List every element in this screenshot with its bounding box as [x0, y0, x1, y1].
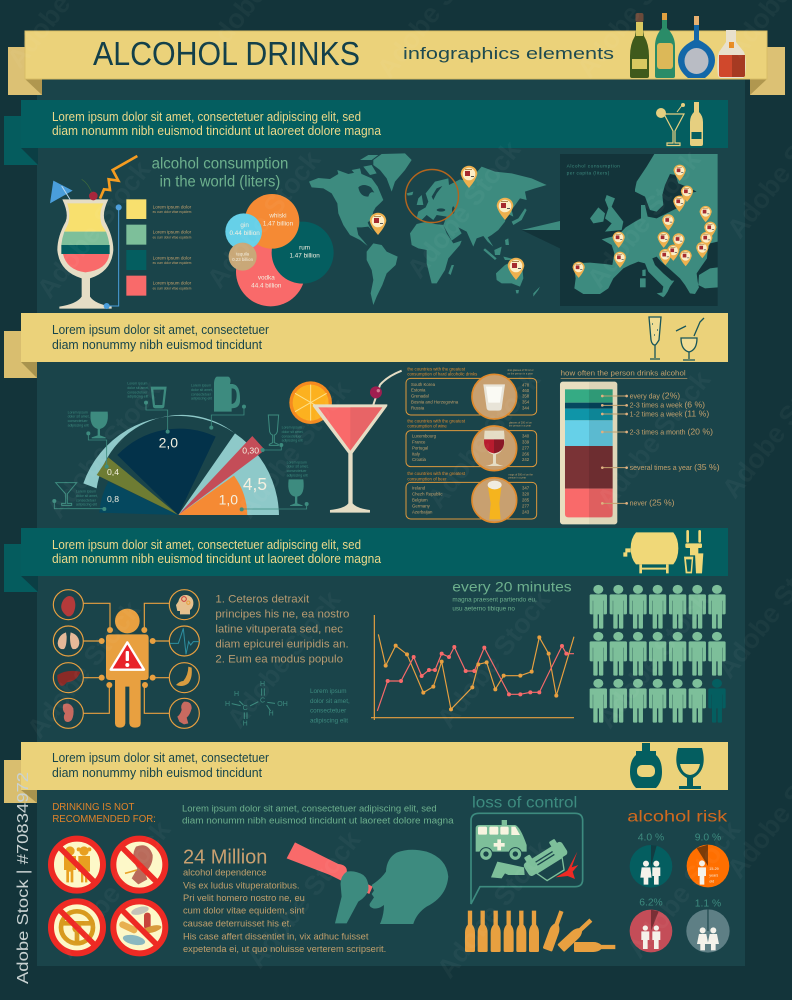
- warning heading: DRINKING IS NOT: [52, 802, 135, 813]
- icon: fetus: [177, 702, 192, 724]
- country consumption tables: 242: [522, 457, 530, 462]
- small captions: adipiscing elit: [287, 473, 308, 477]
- risk pie: 1.1%: 1.1 %: [695, 899, 721, 910]
- country consumption tables: Croatia: [412, 457, 427, 462]
- body text: expetenda ei, ut quo noluisse verterem scripserit.: [183, 944, 386, 954]
- country consumption tables: 277: [522, 504, 530, 509]
- stock watermark text: Adobe Stock | #70834972: [15, 772, 32, 984]
- icon: cognac bottle and snifter: [630, 743, 704, 789]
- section 2 banner: [4, 313, 728, 378]
- main panel: [37, 78, 745, 966]
- body text: cum dolor vitae equidem, sint: [183, 906, 305, 916]
- small captions: adipiscing elit: [127, 395, 148, 399]
- country consumption tables: the countries with the greatest: [407, 366, 466, 371]
- icon: shot glass circle: [472, 374, 517, 419]
- fan values: 0,30: [242, 446, 259, 456]
- icon: wine glass: [288, 479, 304, 506]
- small captions: adipiscing elit: [68, 423, 89, 427]
- molecule diagram: H: [243, 720, 248, 727]
- wedge 2,0: [117, 429, 216, 515]
- europe pins: [573, 165, 716, 278]
- country consumption tables: 340: [522, 434, 530, 439]
- banner text: Lorem ipsum dolor sit amet, consectetuer adipiscing elit, sed: [52, 110, 361, 124]
- lorem text: diam nonumm nibh euismod tincidunt ut laoreet dolore magna: [182, 816, 454, 826]
- wedge 0,4: [97, 457, 178, 515]
- numbered text: diam epicurei euripidis an.: [215, 639, 349, 651]
- small captions: Lorem ipsum: [191, 384, 211, 388]
- country consumption tables: 347: [522, 486, 530, 491]
- section 4 banner: diam nonummy nibh euismod tincidunt: [52, 766, 263, 780]
- frequency glass chart: 1-2 times a week (11 %): [630, 409, 709, 419]
- subtitle: infographics elements: [403, 45, 614, 63]
- europe inset map: Alcohol consumption: [567, 163, 620, 169]
- icon: wine glass circle: [472, 426, 517, 471]
- side text: adipiscing elit: [310, 717, 348, 724]
- bubble chart: tequila: [236, 252, 250, 257]
- bubble chart: 1.47 billion: [263, 221, 294, 228]
- molecule diagram: C: [243, 705, 248, 712]
- icon: crash burst: [556, 852, 578, 879]
- body figure: [99, 609, 156, 728]
- world map: [309, 153, 547, 305]
- bubble chart: 0.23 billion: [232, 257, 254, 262]
- small captions: adipiscing elit: [76, 503, 97, 507]
- molecule diagram: [225, 681, 288, 727]
- icon: beer glass circle: [472, 478, 517, 522]
- country consumption tables: Russia: [411, 405, 425, 410]
- speech bubble: [471, 813, 583, 904]
- risk pie: 4.0%: [630, 833, 672, 888]
- small captions: consectetuer: [191, 392, 212, 396]
- country consumption tables: 266: [522, 451, 530, 456]
- country consumption tables: Germany: [412, 504, 431, 509]
- warning heading: RECOMMENDED FOR:: [52, 814, 156, 825]
- section 2 banner: diam nonummy nibh euismod tincidunt: [52, 338, 263, 352]
- banner text: Lorem ipsum dolor sit amet, consectetuer: [52, 323, 269, 337]
- molecule diagram: OH: [277, 701, 288, 708]
- icon: heartbeat: [170, 628, 199, 654]
- icon: heart: [61, 596, 75, 616]
- fan values: [107, 434, 267, 508]
- warning sign: [111, 642, 144, 670]
- lorem text: Lorem ipsum dolor sit amet, consectetuer adipiscing elit, sed: [182, 804, 437, 814]
- risk pie: 6.2%: 6.2%: [639, 897, 663, 908]
- country consumption tables: glasses of 200 ml on: [509, 421, 532, 424]
- icon: lungs: [58, 632, 79, 649]
- body text: Vis ex ludus vituperatoribus.: [183, 880, 299, 890]
- frequency glass chart: 2-3 times a week (6 %): [630, 400, 705, 410]
- europe inset map: [522, 154, 718, 306]
- country consumption tables: 344: [522, 405, 530, 410]
- line chart: [371, 615, 574, 720]
- ban icon: pills: [113, 901, 165, 953]
- country consumption tables: 460: [522, 388, 530, 393]
- fan values: 0,8: [107, 494, 119, 504]
- country consumption tables: 354: [522, 400, 530, 405]
- small captions: [68, 382, 309, 507]
- people pictogram: [590, 585, 726, 723]
- bubble chart: 44.4 billion: [251, 282, 282, 289]
- heading: alcohol consumption: in the world (liters): [160, 174, 280, 191]
- country consumption tables: consumption of wine: [407, 424, 447, 429]
- risk pie: 9.0%: [687, 833, 729, 887]
- icon: flute: [268, 415, 279, 445]
- banner text: Lorem ipsum dolor sit amet, consectetuer adipiscing elit, sed: [52, 538, 361, 552]
- warning heading: [52, 802, 156, 825]
- country consumption tables: on the person in a year: [507, 372, 533, 375]
- heading: alcohol consumption: [152, 155, 288, 191]
- country consumption tables: 285: [522, 498, 530, 503]
- risk pie: 1.1%: [686, 899, 730, 953]
- bubble chart: rum: [299, 244, 310, 251]
- risk pie: 6.2%: [630, 897, 672, 952]
- country consumption tables: Azerbaijan: [412, 510, 433, 515]
- small captions: dolor sit amet,: [287, 465, 309, 469]
- small captions: Lorem ipsum: [287, 460, 307, 464]
- legend: eu cum dolor vitae equidem: [153, 235, 192, 239]
- section 3 banner: [4, 528, 728, 592]
- molecule diagram: C: [260, 698, 265, 705]
- country consumption tables: the person in a year: [509, 425, 531, 428]
- drinking warning block: [51, 802, 454, 954]
- body text: causae deterruisset his et.: [183, 918, 292, 928]
- small captions: consectetuer: [76, 498, 97, 502]
- fan chart with drink icons: [52, 371, 402, 515]
- icon: cocktail: [56, 483, 77, 505]
- small captions: adipiscing elit: [191, 397, 212, 401]
- fan values: 2,0: [159, 434, 178, 450]
- side text: dolor sit amet,: [310, 698, 350, 705]
- icon: snifter: [90, 412, 108, 438]
- icon: beer mug: [214, 377, 240, 412]
- country consumption tables: Portugal: [412, 446, 428, 451]
- icon: shot glass: [151, 387, 167, 408]
- fan values: 1,0: [219, 492, 238, 508]
- numbered text: 1. Ceteros detraxit: [215, 593, 310, 605]
- heading: every 20 minutes: usu aeterno tibique no: [452, 605, 515, 612]
- icon: barrel and beer tap: [623, 530, 703, 573]
- legend: Lorem ipsum dolor: [153, 255, 192, 260]
- frequency glass chart: every day (2%): [630, 390, 680, 400]
- icon: overturned car: [520, 836, 575, 887]
- risk pie: 9.0%: years: [709, 873, 718, 877]
- section 3 banner: diam nonumm nibh euismod tincidunt ut laoreet dolore magna: [52, 552, 381, 566]
- icon: cherry: [82, 179, 98, 200]
- fan ring: [83, 415, 279, 515]
- small captions: Lorem ipsum: [68, 410, 88, 414]
- country consumption tables: South Korea: [411, 382, 436, 387]
- fan values: 4,5: [243, 474, 267, 494]
- side text: [310, 688, 350, 724]
- legend: Lorem ipsum dolor: [153, 230, 192, 235]
- section 4 banner: [4, 742, 728, 803]
- country consumption tables: shot glasses of 50 ml or: [507, 369, 534, 372]
- ban icon: steering wheel: [51, 901, 103, 953]
- martini illustration: [289, 371, 402, 513]
- human body diagram: [53, 590, 350, 728]
- small captions: dolor sit amet,: [127, 386, 149, 390]
- ban icon: fetus: [113, 839, 165, 891]
- legend: eu cum dolor vitae equidem: [153, 261, 192, 265]
- frequency glass chart: 2-3 times a month (20 %): [630, 427, 713, 437]
- europe highlight circle: [406, 170, 458, 222]
- statistic: 24 Million: 24 Million: [183, 846, 267, 868]
- country consumption tables: Chezh Republic: [412, 492, 443, 497]
- numbered text: principes his ne, ea nostro: [215, 609, 349, 621]
- body text: alcohol dependence: [183, 867, 267, 877]
- connector lines: [54, 403, 307, 509]
- numbered text: 2. Eum ea modus populo: [215, 654, 343, 666]
- bubble chart: 0.44 billion: [230, 230, 260, 237]
- molecule diagram: H: [225, 701, 230, 708]
- numbered text: [215, 593, 349, 666]
- numbered text: latine vituperata sed, nec: [215, 624, 343, 636]
- legend: Lorem ipsum dolor: [153, 281, 192, 286]
- risk pie: 9.0%: 9.0 %: [695, 833, 721, 844]
- small captions: dolor sit amet,: [68, 415, 90, 419]
- icon: liver: [57, 671, 81, 686]
- icon: martini and bottle: [656, 102, 703, 146]
- wedge 1,0: [178, 476, 247, 515]
- country consumption tables: the countries with the greatest: [407, 418, 466, 423]
- molecule diagram: H: [269, 711, 274, 718]
- cocktail glass with layers: [50, 155, 334, 309]
- country consumption tables: consumption of hard alcoholic drinks: [407, 372, 477, 377]
- country consumption tables: 478: [522, 382, 530, 387]
- loss of control block: [465, 795, 730, 953]
- legend: eu cum dolor vitae equidem: [153, 286, 192, 290]
- small captions: dolor sit amet,: [191, 388, 213, 392]
- country consumption tables: Bosnia and Herzegovina: [411, 400, 459, 405]
- body text: [183, 867, 386, 954]
- icon: umbrella: [50, 181, 73, 203]
- country consumption tables: Ireland: [412, 486, 426, 491]
- risk pie: 9.0%: 15-29: [709, 867, 719, 871]
- country consumption tables: Italy: [412, 451, 421, 456]
- fan values: 0,4: [107, 467, 119, 477]
- bubble chart: gin: [240, 222, 249, 229]
- frequency glass chart: [560, 368, 720, 524]
- small captions: Lorem ipsum: [76, 490, 96, 494]
- frequency glass chart: never (25 %): [630, 498, 675, 508]
- country consumption tables: [406, 366, 537, 522]
- section 1 banner: [4, 100, 728, 165]
- small captions: Lorem ipsum: [282, 426, 302, 430]
- heading: every 20 minutes: [452, 580, 572, 612]
- country consumption tables: Luxembourg: [412, 434, 437, 439]
- molecule diagram: H: [260, 681, 265, 688]
- country consumption tables: France: [412, 440, 426, 445]
- country consumption tables: person in a year: [508, 477, 526, 480]
- world map pins: [370, 166, 524, 280]
- country consumption tables: Belgium: [412, 498, 428, 503]
- risk pie: 4.0%: 4.0 %: [638, 833, 664, 844]
- wedge 0,30: [178, 436, 265, 515]
- country consumption tables: 277: [522, 446, 530, 451]
- icon: pistol: [491, 862, 525, 878]
- icon: kidney: [63, 704, 74, 722]
- title ribbon: [8, 31, 785, 95]
- bubble chart: [225, 194, 334, 306]
- heading: every 20 minutes: magna praesent partiendo eu,: [452, 597, 537, 604]
- heading: every 20 minutes: every 20 minutes: [452, 580, 572, 595]
- heading: alcohol risk: alcohol risk: [627, 809, 729, 826]
- small captions: consectetuer: [127, 390, 148, 394]
- frequency glass chart: several times a year (35 %): [630, 462, 720, 472]
- icon: top bottles: [630, 13, 746, 78]
- icon: flute and martini: [649, 317, 704, 360]
- icon: head with gears: [176, 595, 193, 614]
- small captions: consectetuer: [68, 419, 88, 423]
- legend: [126, 199, 192, 296]
- wedge 0,8: [99, 482, 178, 515]
- legend: eu cum dolor vitae equidem: [153, 210, 192, 214]
- europe inset map: per capita (liters): [567, 170, 610, 176]
- heading: loss of control: loss of control: [472, 795, 577, 812]
- title: ALCOHOL DRINKS: [93, 35, 360, 72]
- body text: His case affert dissentiet in, vix adhuc fuisset: [183, 931, 369, 941]
- country consumption tables: the countries with the greatest: [407, 471, 466, 476]
- small captions: dolor sit amet,: [76, 494, 98, 498]
- country consumption tables: 339: [522, 440, 530, 445]
- country consumption tables: consumption of beer: [407, 476, 447, 481]
- country consumption tables: 358: [522, 394, 530, 399]
- small captions: dolor sit amet,: [282, 430, 304, 434]
- lorem text: [182, 804, 454, 826]
- icon: stomach: [176, 667, 192, 686]
- small captions: adipiscing elit: [282, 439, 303, 443]
- country consumption tables: Grenadal: [411, 393, 429, 398]
- legend connector: [104, 204, 122, 309]
- small captions: consectetuer: [287, 469, 307, 473]
- country consumption tables: 243: [522, 510, 530, 515]
- chart heading: how often the person drinks alcohol: [561, 368, 686, 377]
- molecule diagram: H: [234, 691, 239, 698]
- heading: alcohol consumption: alcohol consumption: [152, 155, 288, 172]
- bottles row: [465, 909, 615, 952]
- small captions: Lorem ipsum: [127, 382, 148, 386]
- country consumption tables: mugs of 500 ml on the: [508, 473, 534, 476]
- icon: ambulance: [476, 820, 527, 860]
- drinker illustration: [287, 842, 448, 924]
- side text: Lorem ipsum: [310, 688, 347, 695]
- line chart and people: [371, 580, 726, 723]
- banner text: Lorem ipsum dolor sit amet, consectetuer: [52, 751, 269, 765]
- side text: consectetuer: [310, 708, 346, 715]
- bubble chart: 1.47 billion: [290, 252, 320, 259]
- legend: Lorem ipsum dolor: [153, 204, 192, 209]
- country consumption tables: 320: [522, 492, 530, 497]
- country consumption tables: Estonia: [411, 388, 426, 393]
- icon: straw: [100, 156, 137, 199]
- ban icon: children: [51, 839, 103, 891]
- bubble chart: vodka: [258, 274, 275, 281]
- bubble chart: whiski: [268, 213, 287, 220]
- risk pie: 9.0%: old: [709, 880, 714, 884]
- body text: Pri velit homero nostro ne, eu: [183, 893, 305, 903]
- section 1 banner: diam nonumm nibh euismod tincidunt ut laoreet dolore magna: [52, 124, 381, 138]
- small captions: consectetuer: [282, 434, 302, 438]
